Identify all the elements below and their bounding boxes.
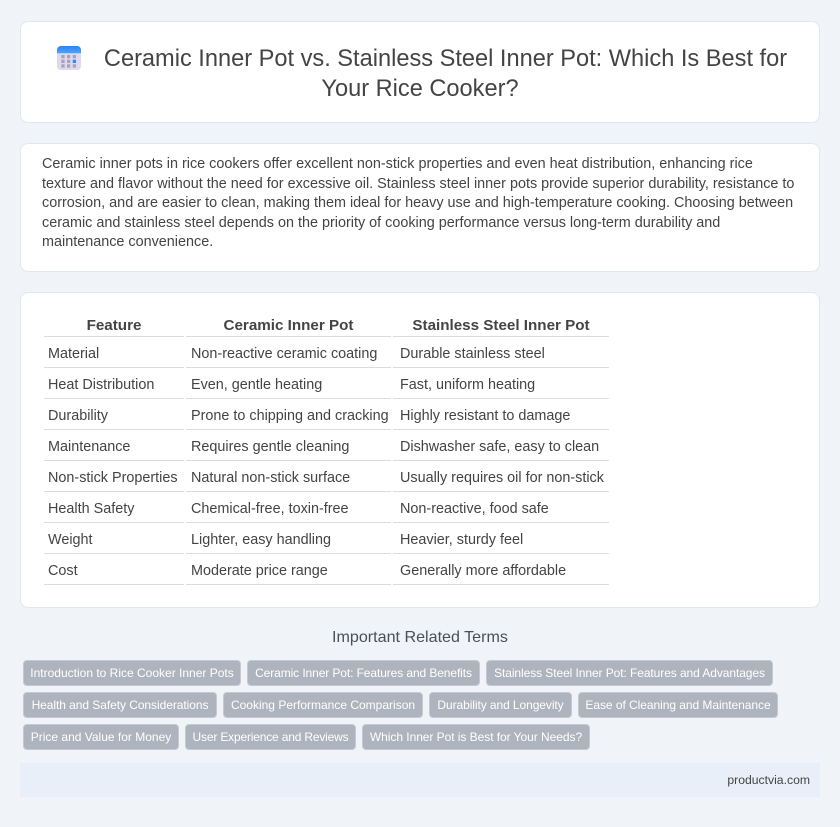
row: material xyxy=(44,346,609,368)
panel: summary xyxy=(20,143,820,272)
title: Ceramic Inner Pot vs. Stainless Steel Inner Pot: Which Is Best for xyxy=(104,46,787,72)
row: non-stick properties xyxy=(44,470,609,492)
icon: calendar xyxy=(57,46,81,70)
text block: summary: corrosion, and are easier to clean, making them ideal for heavy use and high-temperature cooking. Choosing between xyxy=(42,195,793,211)
row: weight: Heavier, sturdy feel xyxy=(400,532,523,548)
tag xyxy=(23,660,241,686)
text block: summary: Ceramic inner pots in rice cookers offer excellent non-stick properties and even heat distribution, enhancing rice xyxy=(42,156,753,172)
row: heat distribution: Fast, uniform heating xyxy=(400,377,535,393)
title: Your Rice Cooker? xyxy=(321,76,519,102)
row: non-stick properties: Non-stick Properties xyxy=(48,470,178,486)
row: health safety: Non-reactive, food safe xyxy=(400,501,549,517)
row: maintenance: Dishwasher safe, easy to clean xyxy=(400,439,599,455)
text block: summary: texture and flavor without the need for excessive oil. Stainless steel inner pots provide superior durability, resistance to xyxy=(42,176,794,192)
row: material: Material xyxy=(48,346,99,362)
tag: Ceramic Inner Pot: Features and Benefits xyxy=(255,666,472,680)
row: maintenance: Maintenance xyxy=(48,439,130,455)
tag: Ease of Cleaning and Maintenance xyxy=(585,698,771,712)
row: weight: Lighter, easy handling xyxy=(191,532,331,548)
tag: Stainless Steel Inner Pot: Features and Advantages xyxy=(494,666,765,680)
footer bar xyxy=(20,763,820,797)
row: non-stick properties: Natural non-stick surface xyxy=(191,470,350,486)
row: material: Durable stainless steel xyxy=(400,346,545,362)
tag: Durability and Longevity xyxy=(437,698,564,712)
panel: comparison table xyxy=(20,292,820,608)
tag: Health and Safety Considerations xyxy=(32,698,208,712)
text block: summary: ceramic and stainless steel depends on the priority of cooking performance versus long-term durability and xyxy=(42,214,720,230)
tag xyxy=(362,724,590,750)
footer text: productvia.com xyxy=(727,773,810,787)
heading: related terms: Important Related Terms xyxy=(332,628,508,646)
table header: Stainless Steel Inner Pot xyxy=(412,317,590,334)
row: heat distribution: Even, gentle heating xyxy=(191,377,322,393)
row: material: Non-reactive ceramic coating xyxy=(191,346,377,362)
row: weight xyxy=(44,532,609,554)
tag xyxy=(223,692,423,718)
tag xyxy=(486,660,773,686)
row: health safety xyxy=(44,501,609,523)
tag xyxy=(185,724,356,750)
tag xyxy=(23,724,179,750)
tag xyxy=(23,692,217,718)
tag: Introduction to Rice Cooker Inner Pots xyxy=(30,666,234,680)
table header: Ceramic Inner Pot xyxy=(224,317,353,334)
row: maintenance: Requires gentle cleaning xyxy=(191,439,349,455)
panel: header xyxy=(20,21,820,123)
comparison table xyxy=(44,317,609,585)
tag xyxy=(578,692,778,718)
row: weight: Weight xyxy=(48,532,93,548)
tag: Price and Value for Money xyxy=(31,730,171,744)
row: health safety: Chemical-free, toxin-free xyxy=(191,501,349,517)
row: cost xyxy=(44,563,609,585)
row: cost: Cost xyxy=(48,563,78,579)
tag: Which Inner Pot is Best for Your Needs? xyxy=(370,730,582,744)
text block: summary xyxy=(42,156,794,250)
tag: Cooking Performance Comparison xyxy=(231,698,415,712)
title xyxy=(104,46,787,102)
row: maintenance xyxy=(44,439,609,461)
tag xyxy=(429,692,572,718)
row: cost: Moderate price range xyxy=(191,563,328,579)
table header: Feature xyxy=(87,317,141,334)
row: heat distribution: Heat Distribution xyxy=(48,377,154,393)
row: cost: Generally more affordable xyxy=(400,563,566,579)
row: health safety: Health Safety xyxy=(48,501,134,517)
row: durability xyxy=(44,408,609,430)
row: non-stick properties: Usually requires oil for non-stick xyxy=(400,470,604,486)
text block: summary: maintenance convenience. xyxy=(42,234,213,250)
table header xyxy=(44,317,609,337)
tag xyxy=(247,660,480,686)
row: durability: Highly resistant to damage xyxy=(400,408,570,424)
row: durability: Prone to chipping and cracking xyxy=(191,408,389,424)
tag: User Experience and Reviews xyxy=(193,730,348,744)
row: heat distribution xyxy=(44,377,609,399)
related term tags xyxy=(23,660,778,750)
row: durability: Durability xyxy=(48,408,108,424)
